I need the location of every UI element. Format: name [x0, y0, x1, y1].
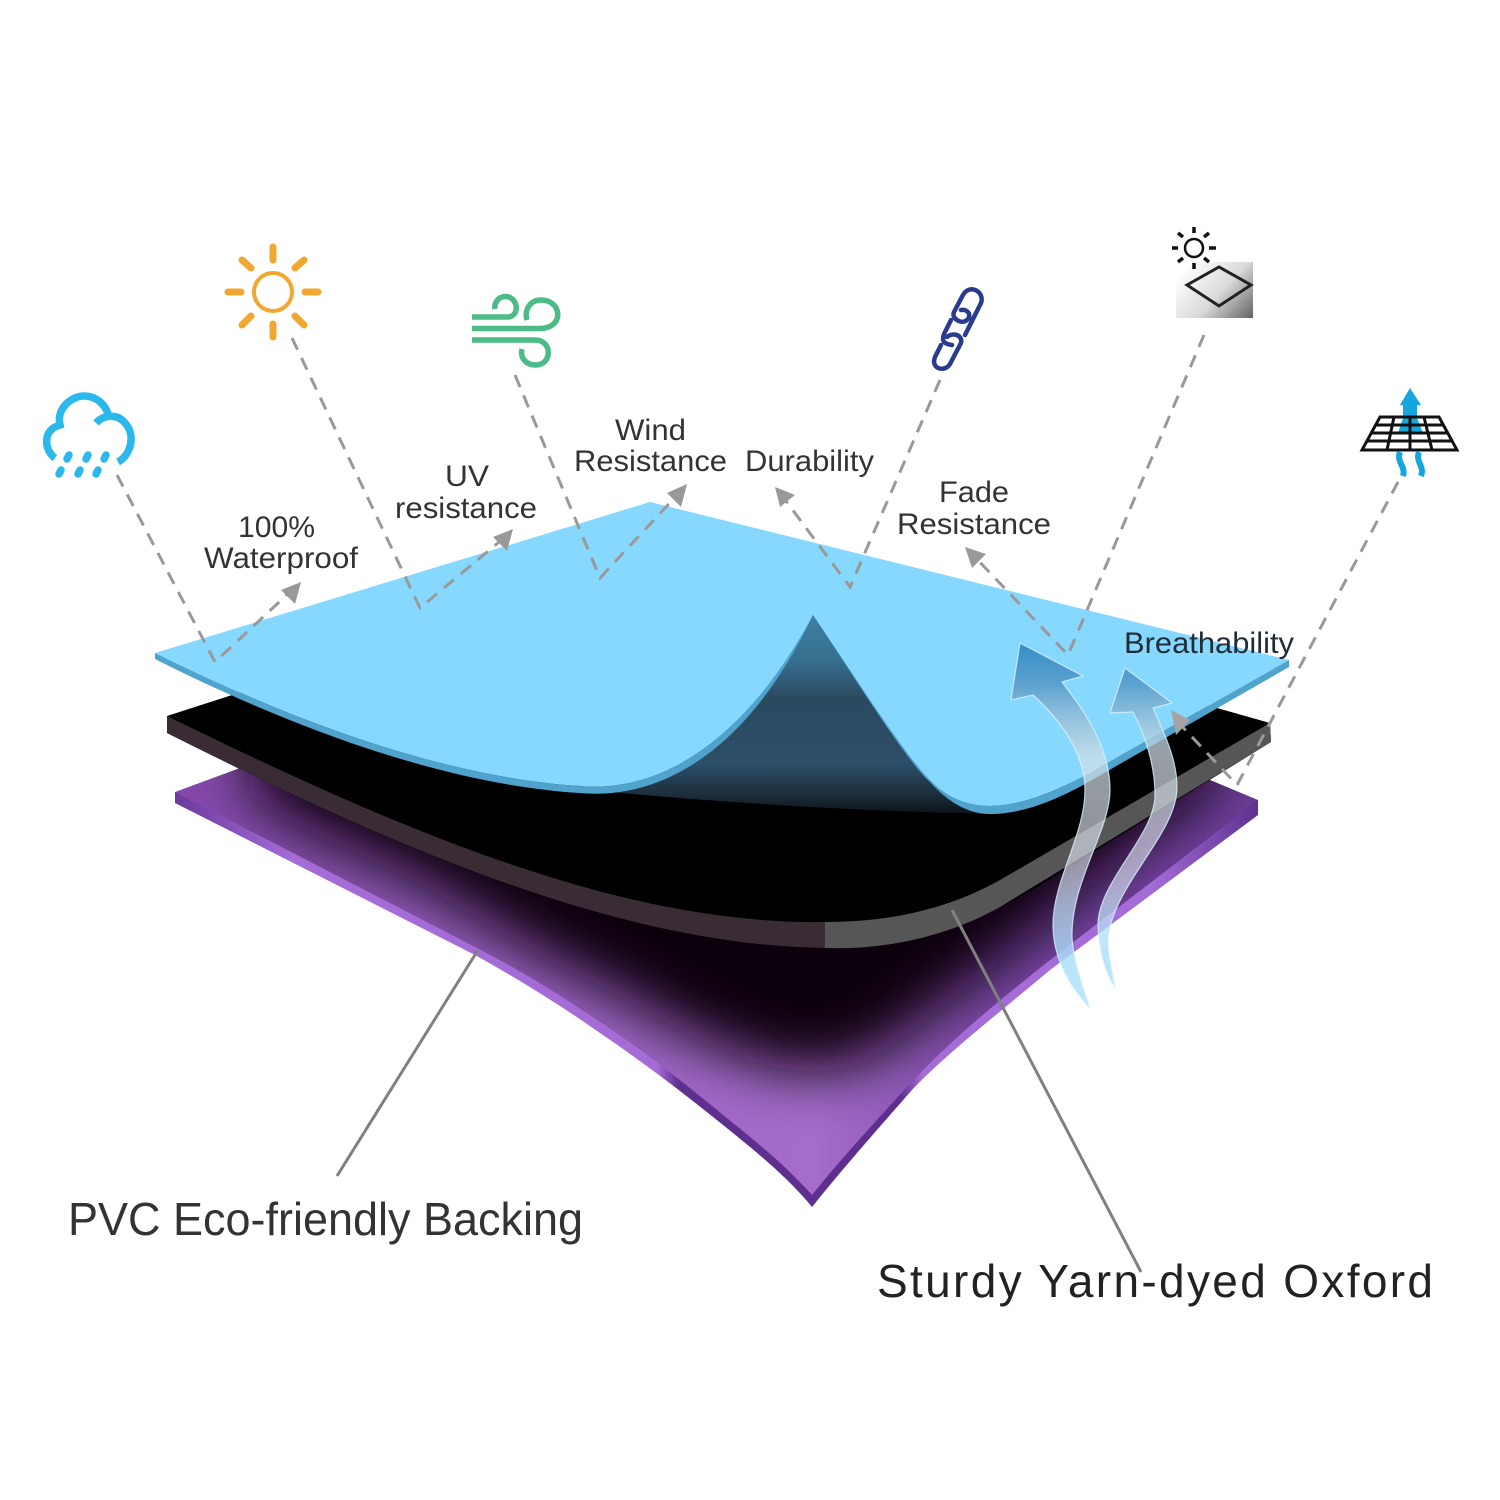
panel: black oxford fabric layer	[167, 560, 1271, 948]
label: UV resistance: resistance	[395, 492, 537, 525]
label: fade resistance	[897, 476, 1051, 541]
label: durability: Durability	[745, 445, 874, 478]
label: wind resistance: Resistance	[574, 445, 727, 478]
label: oxford fabric: Sturdy Yarn-dyed Oxford	[877, 1255, 1433, 1307]
label: UV resistance	[395, 460, 537, 525]
label: 100% waterproof: Waterproof	[204, 542, 359, 575]
icon: breathable membrane	[1362, 388, 1457, 476]
icon: rain cloud	[47, 396, 131, 474]
arrow: breathable air flow left	[1011, 643, 1110, 1008]
dashed arrow: UV resistance	[292, 338, 513, 608]
panel: blue top fabric layer	[155, 502, 1289, 814]
icon: chain link	[934, 289, 982, 369]
dashed arrow: wind resistance	[515, 375, 687, 578]
leader line: oxford fabric	[952, 910, 1141, 1272]
label: UV resistance: UV	[445, 460, 489, 493]
icon: fade resistance sun and fabric	[1172, 227, 1253, 318]
dashed arrow: fade resistance	[965, 335, 1204, 655]
panel: purple PVC backing layer	[175, 768, 1258, 1207]
leader line: PVC backing	[337, 950, 478, 1176]
icon: sun	[228, 247, 318, 337]
dashed arrow: waterproof	[117, 475, 301, 662]
dashed arrow: durability	[775, 380, 940, 587]
icon: wind	[472, 296, 558, 365]
label: fade resistance: Resistance	[897, 508, 1051, 541]
arrow: breathable air flow right	[1098, 668, 1177, 987]
label: fade resistance: Fade	[939, 476, 1009, 509]
label: wind resistance	[574, 414, 727, 478]
label: PVC backing: PVC Eco-friendly Backing	[68, 1193, 583, 1245]
label: wind resistance: Wind	[615, 414, 686, 447]
label: 100% waterproof: 100%	[238, 511, 315, 544]
label: breathability: Breathability	[1124, 627, 1294, 660]
dashed arrow: breathability	[1171, 482, 1398, 785]
panel: curled underside of blue layer	[610, 615, 1005, 814]
label: 100% waterproof	[204, 511, 359, 575]
